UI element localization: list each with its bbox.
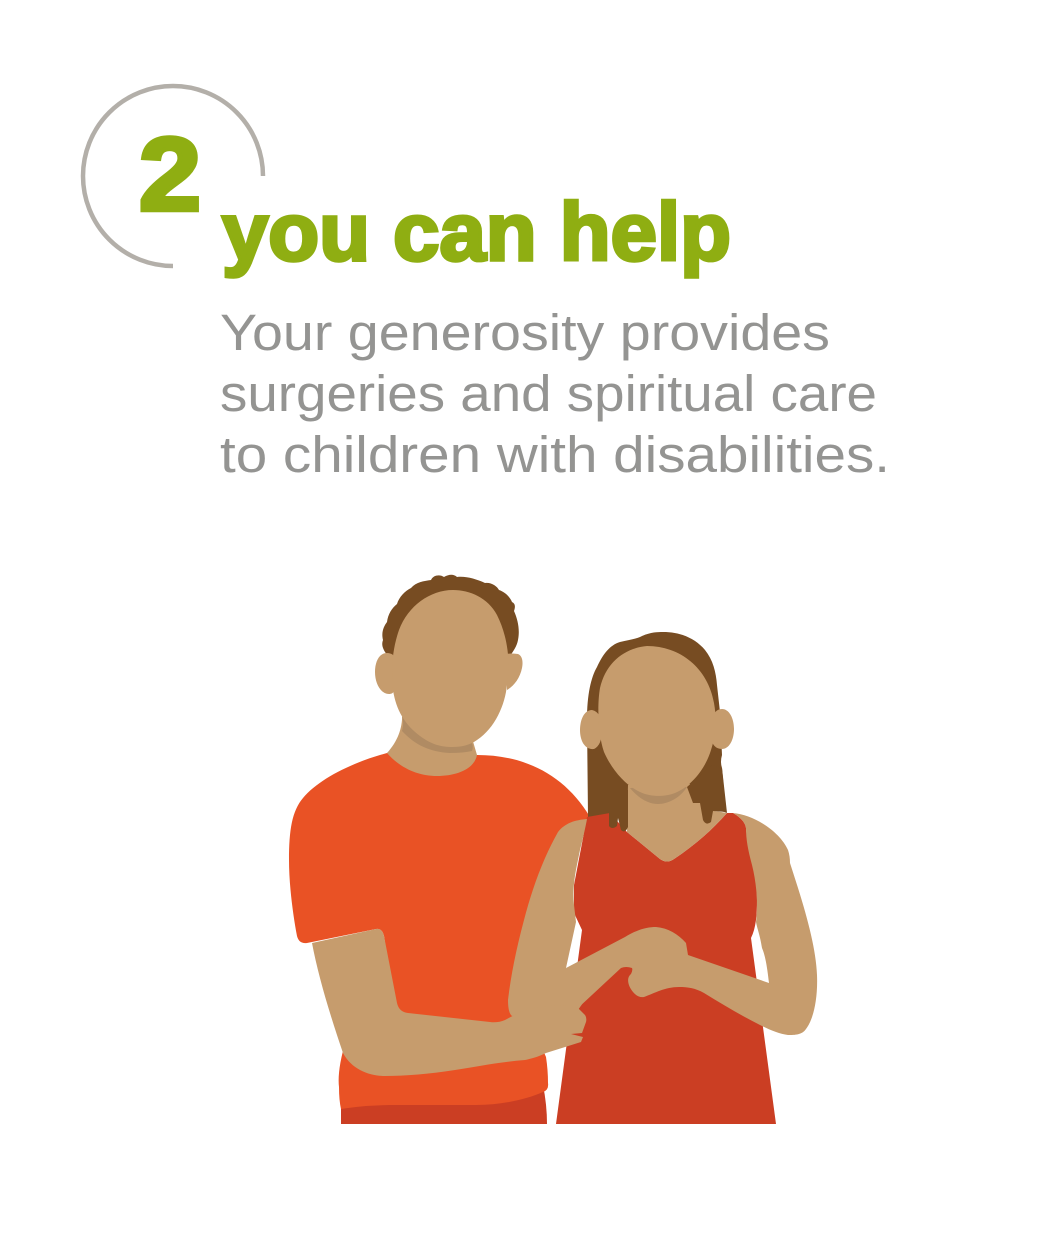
man's face — [392, 590, 509, 747]
woman's red dress — [556, 813, 776, 1124]
woman's hair locks — [609, 765, 726, 831]
woman's neck — [627, 780, 727, 862]
man's hair — [382, 575, 519, 657]
heading: you can help — [222, 187, 731, 278]
body text: surgeries and spiritual care — [220, 365, 877, 422]
body text: Your generosity provides — [220, 304, 830, 361]
man's neck — [387, 712, 477, 776]
woman's ears — [580, 709, 734, 749]
woman's hair — [587, 632, 727, 817]
woman's left arm — [508, 819, 587, 1016]
illustration: man and woman — [289, 575, 817, 1124]
man's trousers — [341, 1085, 547, 1124]
icon: open circle ring — [83, 86, 263, 266]
man's ears — [375, 653, 523, 694]
man's neck shadow — [402, 717, 473, 753]
man's orange t-shirt — [289, 753, 590, 1109]
woman's face — [598, 646, 716, 796]
body text: to children with disabilities. — [220, 426, 890, 483]
step number: 2 — [139, 117, 201, 233]
woman's neck shadow — [630, 787, 687, 804]
man's arm and hand — [312, 929, 586, 1076]
woman's right shoulder and arm — [566, 813, 817, 1035]
body text — [220, 304, 890, 483]
